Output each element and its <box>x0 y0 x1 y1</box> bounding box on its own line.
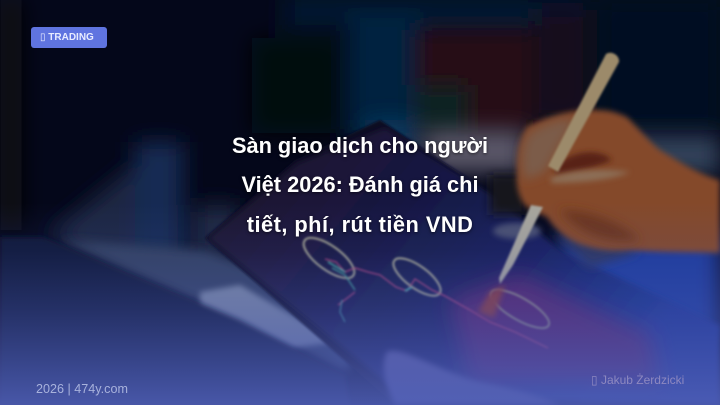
title: tiết, phí, rút tiền VND <box>247 212 473 236</box>
lower hand blur <box>384 351 560 405</box>
chart on tablet <box>298 231 554 348</box>
title: Sàn giao dịch cho người <box>232 132 488 158</box>
lit area under hand <box>493 223 541 239</box>
reddish glow on tablet <box>450 275 660 385</box>
title: Việt 2026: Đánh giá chi <box>241 172 479 197</box>
photo credit: ▯ Jakub Żerdzicki <box>591 373 684 387</box>
finger reflection red on screen <box>478 285 505 318</box>
laptop in foreground <box>0 237 350 405</box>
tablet <box>205 120 720 405</box>
light surface between laptop and tablet <box>60 240 370 372</box>
footer: year and site: 2026 | 474y.com <box>36 382 128 396</box>
hand <box>517 110 720 253</box>
title <box>232 132 488 238</box>
stylus <box>499 53 619 284</box>
badge: trading <box>31 27 107 48</box>
badge: trading: ▯ TRADING <box>40 32 94 43</box>
